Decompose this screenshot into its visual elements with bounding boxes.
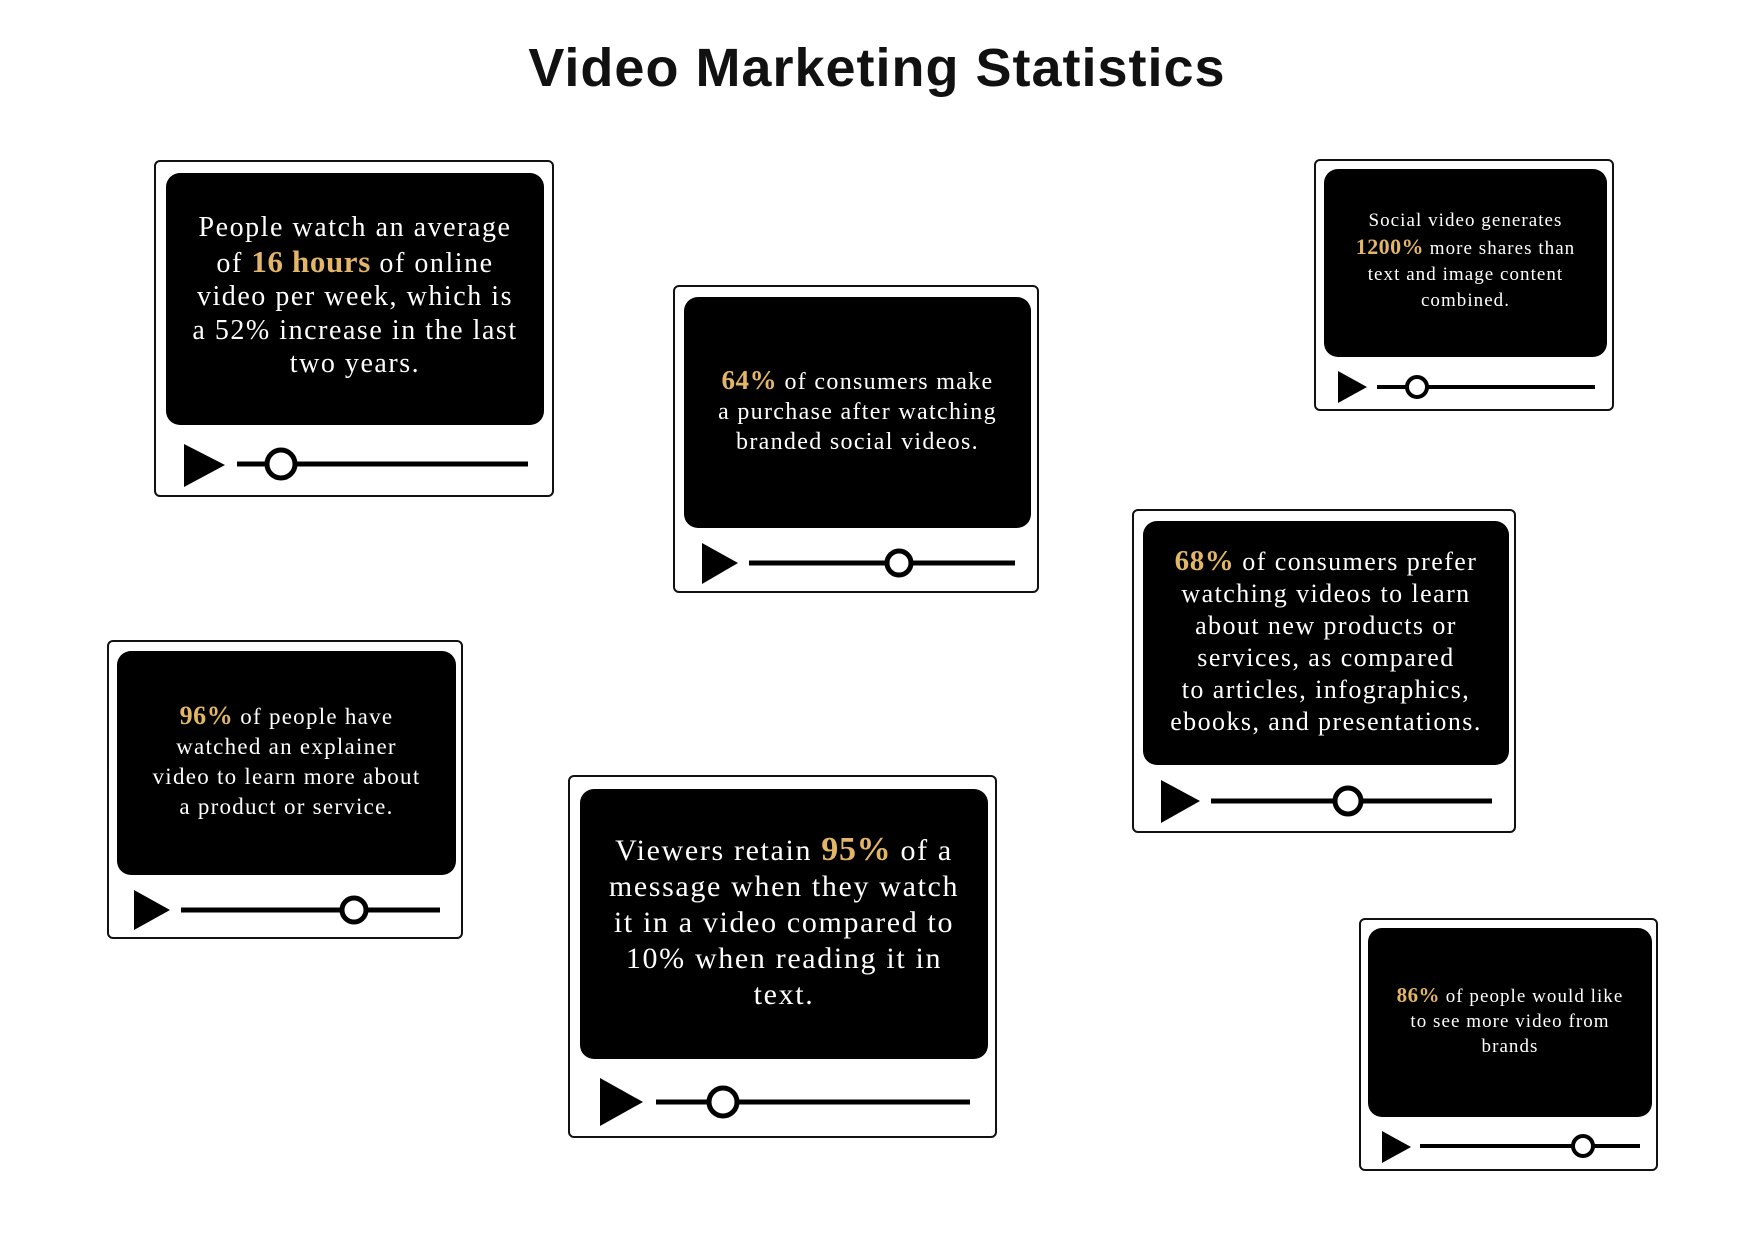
- panel: 96%: [107, 640, 463, 939]
- screen text: to articles, infographics,: [1182, 674, 1470, 704]
- screen text: brands: [1482, 1036, 1538, 1056]
- screen text: 68% of consumers prefer: [1175, 544, 1477, 576]
- screen text: a product or service.: [179, 794, 394, 818]
- player controls: [600, 1078, 970, 1126]
- screen text: about new products or: [1195, 610, 1457, 640]
- screen text: watched an explainer: [176, 734, 397, 758]
- screen text: a purchase after watching: [718, 398, 997, 424]
- screen text: ebooks, and presentations.: [1170, 706, 1482, 736]
- screen text: [166, 173, 544, 425]
- player controls: [1382, 1131, 1640, 1163]
- screen text: it in a video compared to: [614, 906, 954, 938]
- player controls: [702, 543, 1015, 584]
- screen text: [580, 789, 988, 1059]
- screen text: [684, 297, 1031, 528]
- screen text: [117, 651, 456, 875]
- screen text: People watch an average: [199, 212, 511, 243]
- title: Video Marketing Statistics: [528, 38, 1226, 98]
- panel: 95%: [568, 775, 997, 1138]
- screen text: combined.: [1421, 290, 1510, 311]
- panel: 64%: [673, 285, 1039, 593]
- panel: 68%: [1132, 509, 1516, 833]
- panel: 86%: [1359, 918, 1658, 1171]
- screen text: watching videos to learn: [1181, 578, 1471, 608]
- screen text: text.: [754, 978, 814, 1010]
- screen text: [1324, 169, 1607, 357]
- screen text: 1200% more shares than: [1356, 234, 1575, 259]
- screen text: 64% of consumers make: [722, 364, 994, 394]
- player controls: [134, 890, 440, 930]
- screen text: 10% when reading it in: [626, 942, 942, 974]
- screen text: video per week, which is: [197, 281, 513, 312]
- screen text: a 52% increase in the last: [192, 315, 518, 346]
- player controls: [1161, 780, 1492, 823]
- screen text: 86% of people would like: [1397, 982, 1623, 1006]
- screen text: 96% of people have: [180, 700, 393, 730]
- panel: 1200%: [1314, 159, 1614, 411]
- screen text: services, as compared: [1197, 642, 1455, 672]
- panel: 16 hours: [154, 160, 554, 497]
- screen text: branded social videos.: [736, 428, 979, 454]
- screen text: video to learn more about: [153, 764, 420, 788]
- screen text: message when they watch: [609, 870, 959, 902]
- screen text: text and image content: [1368, 264, 1563, 285]
- screen text: [1368, 928, 1652, 1117]
- player controls: [1338, 371, 1595, 403]
- screen text: two years.: [290, 348, 420, 379]
- screen text: of 16 hours of online: [216, 244, 494, 279]
- screen text: Social video generates: [1369, 210, 1562, 231]
- player controls: [184, 444, 528, 487]
- screen text: to see more video from: [1410, 1010, 1610, 1032]
- screen text: Viewers retain 95% of a: [615, 830, 953, 868]
- screen text: [1143, 521, 1509, 765]
